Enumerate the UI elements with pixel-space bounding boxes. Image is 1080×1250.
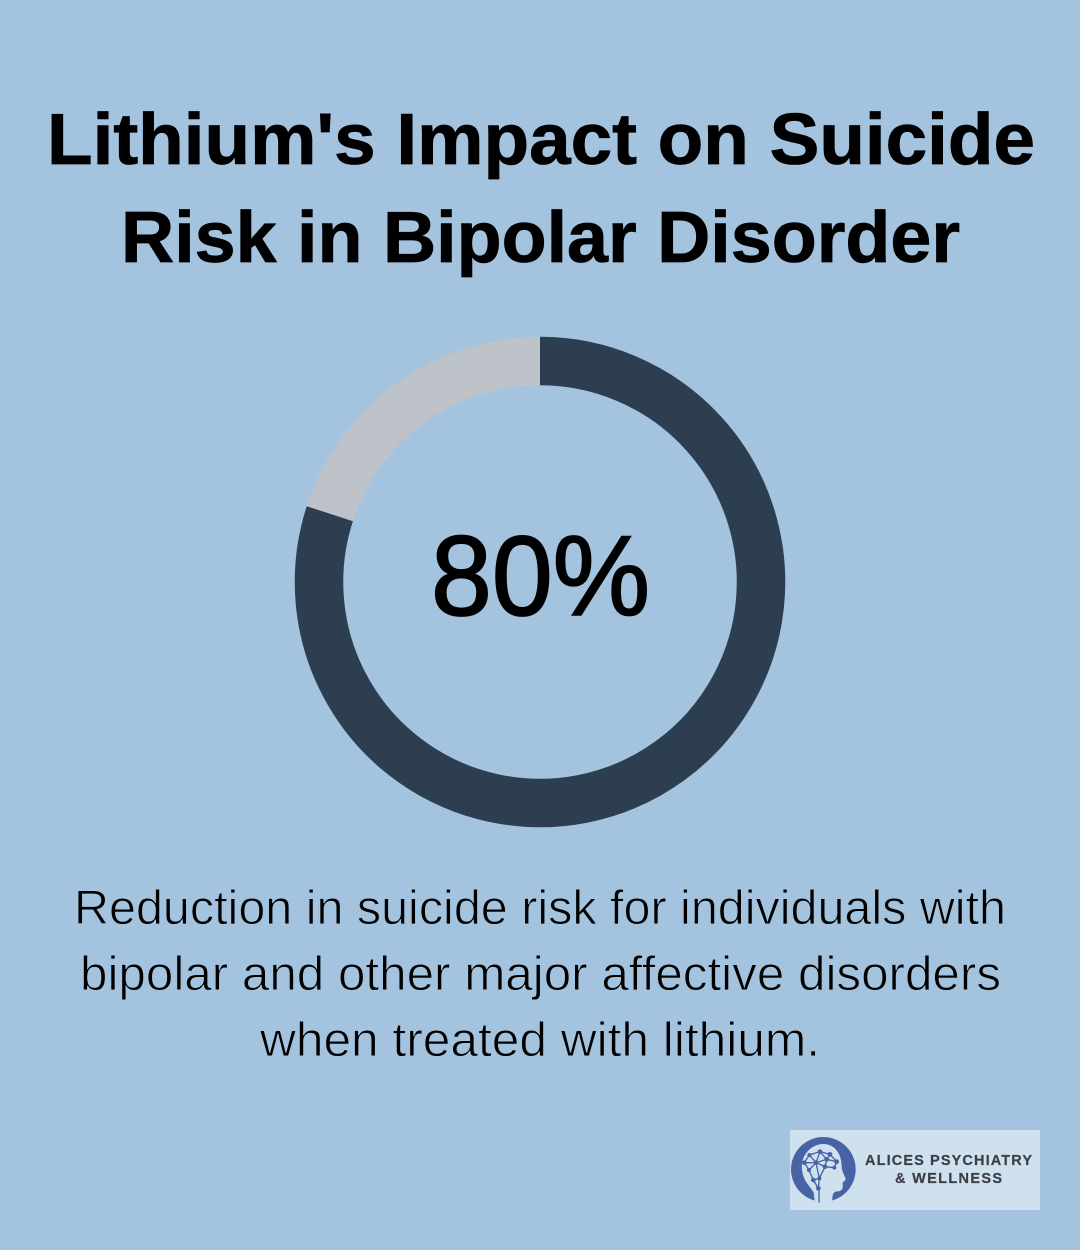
chart segment: 80% xyxy=(319,361,761,803)
logo wordmark: ALICES PSYCHIATRY xyxy=(865,1153,1032,1169)
description text: bipolar and other major affective disorders xyxy=(80,948,1001,1001)
description text xyxy=(74,882,1006,1067)
title: Risk in Bipolar Disorder xyxy=(121,198,960,278)
title: Lithium's Impact on Suicide xyxy=(47,100,1035,180)
icon: head with brain network xyxy=(791,1137,856,1203)
donut chart: 80% xyxy=(319,361,761,803)
title xyxy=(47,100,1035,278)
logo: Alices Psychiatry & Wellness xyxy=(790,1130,1040,1210)
description text: Reduction in suicide risk for individuals with xyxy=(74,882,1006,935)
chart segment: remaining 20% xyxy=(330,361,540,514)
logo wordmark xyxy=(865,1153,1032,1187)
stat value: 80% xyxy=(431,513,650,639)
logo wordmark: & WELLNESS xyxy=(895,1171,1002,1187)
description text: when treated with lithium. xyxy=(259,1014,820,1067)
